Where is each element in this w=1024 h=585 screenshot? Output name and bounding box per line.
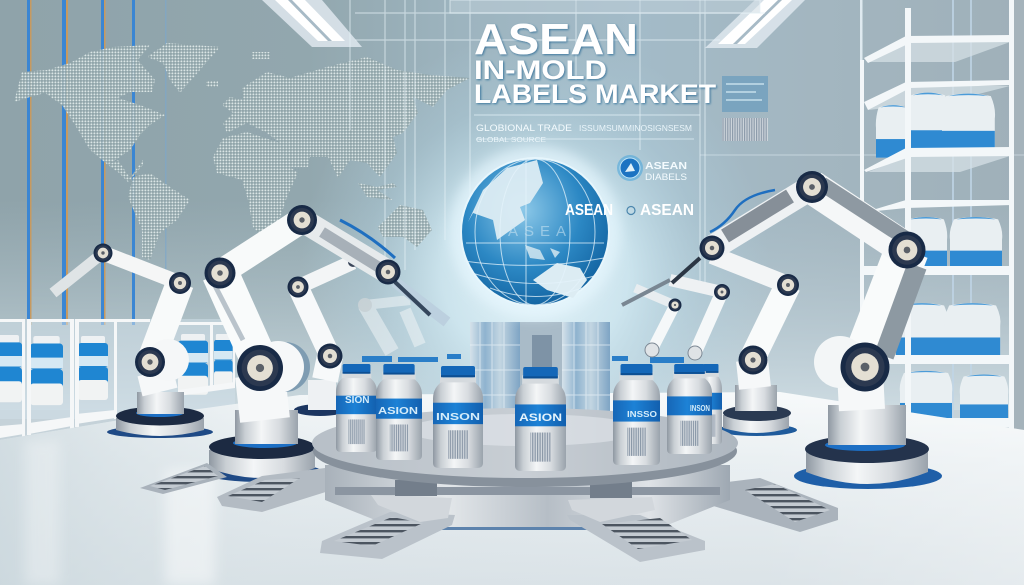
title: IN-MOLD [474,55,607,85]
holographic globe [449,146,621,318]
robot arm: middle right [712,255,799,436]
bottle 6: INSON [690,404,710,413]
shelf frame [860,0,1014,438]
base [717,385,797,436]
title: LABELS MARKET [474,79,717,109]
foot: side left [140,463,227,494]
bottle 7 [700,364,722,444]
foot: mid left [217,468,332,512]
bottles on turntable [336,364,722,471]
map: Eurasia [222,57,470,178]
bottle 5: INSSO [627,409,657,419]
robot arm: big left [202,205,447,482]
base drum [325,465,730,530]
drums [0,334,233,405]
dotted world map [14,43,470,260]
map: Australia [378,205,432,247]
bottle 6 [667,364,712,454]
vertical light strips [27,0,166,325]
right shelving with barrels [860,0,1014,438]
shelf decks [868,42,1010,172]
badge: ASEAN diabels: ASEAN [645,160,687,172]
title [474,15,717,109]
bottle 2 [376,364,422,460]
rear row of bottle caps [362,354,684,363]
badge: ASEAN diabels: DIABELS [645,172,687,182]
bottle 4: ASION [519,412,562,424]
globe: land masses [468,160,587,298]
left shelving with drums [0,319,235,438]
bottle 2: ASION [378,406,418,417]
subtitle block: GLOBIONAL TRADE [476,123,572,134]
map: Central America [108,160,143,182]
upper barrels [876,93,995,158]
title: ASEAN [474,15,638,64]
hologram glow [290,30,780,470]
map: Africa [213,132,298,237]
base [202,410,322,482]
base [294,380,346,416]
robot arm: middle left [288,257,358,416]
shelf uprights [0,319,235,438]
map: South America [128,173,190,260]
foot: front left [320,480,455,559]
ceiling light right [705,0,805,48]
foot: side right [695,478,838,532]
turntable plate [313,415,737,487]
foot: front right [567,482,705,562]
central glass machine [445,322,632,442]
globe labels: ASEAN [640,202,694,219]
back wall [0,0,1024,430]
globe labels [565,202,694,219]
bottle 3 [433,366,483,468]
subtitle block: ISSUMSUMMINOSIGNSESM [579,123,692,133]
subtitle block [474,115,700,144]
globe: ASEAN ghost text: ASEA [508,223,572,240]
bottle 1: SION [345,395,369,406]
base [794,405,942,489]
map: North America [14,45,165,165]
bottle 3: INSON [436,411,480,423]
top row barrels on second shelf [905,217,1002,269]
bottle 4 [515,367,566,471]
map: Iceland and islands [206,52,270,87]
bottle 1 [336,364,377,452]
robot arm: back left faint [358,298,420,352]
robot arm: big right [672,171,942,489]
turntable platform and feet [140,408,838,562]
bottle 5 [613,364,660,465]
lower barrels [900,371,1008,421]
base [107,392,213,438]
globe labels: ASEAN [565,202,613,219]
robot arm: back right small [622,280,730,360]
globe: grid lines [464,159,604,305]
subtitle block: GLOBAL SOURCE [476,137,546,144]
robot arm: far left [53,244,213,438]
middle barrels [896,303,1000,356]
floor [0,392,1024,585]
right side data panels [722,76,768,141]
hologram glass frame [350,0,1024,290]
map: Indonesia [358,183,397,200]
map: Greenland [147,43,220,93]
badge: ASEAN diabels [617,155,687,182]
ceiling light left [262,0,362,47]
